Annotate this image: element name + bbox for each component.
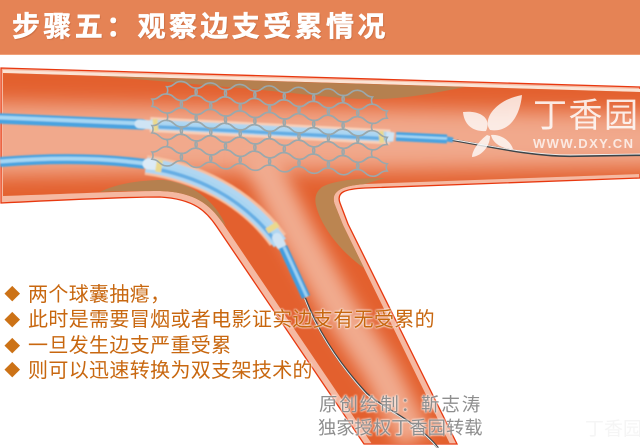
plaque: top <box>95 76 465 99</box>
bullet text 1: 两个球囊抽瘪， <box>28 284 170 306</box>
header band <box>0 0 640 55</box>
logo: flower <box>463 95 522 157</box>
bullet marker 4 <box>4 362 19 377</box>
logo: name: 丁香园 <box>533 97 640 135</box>
upper wall highlight <box>3 70 640 92</box>
guide wire: main <box>452 140 640 156</box>
bullet marker 3 <box>4 338 19 353</box>
bullet text 3: 一旦发生边支严重受累 <box>28 335 232 357</box>
guide wire: branch <box>305 298 438 448</box>
balloon: branch <box>146 160 281 245</box>
credit: license: 独家授权丁香园转载 <box>318 417 483 438</box>
bullet list <box>4 284 435 382</box>
stent mesh <box>152 80 387 177</box>
credit: author: 原创绘制：靳志涛 <box>319 394 482 415</box>
title: 步骤五：观察边支受累情况 <box>12 11 389 42</box>
plaque: right carina <box>315 178 385 268</box>
logo: url: WWW.DXY.CN <box>533 136 634 151</box>
catheter: branch shaft lower <box>283 247 307 297</box>
bullet text 4: 则可以迅速转换为双支架技术的 <box>28 360 313 382</box>
catheter: main shaft right <box>396 136 453 140</box>
catheter: branch shaft upper <box>0 159 145 164</box>
bullet marker 1 <box>4 286 19 301</box>
plaque: lower left <box>100 180 226 226</box>
catheter: main shaft left <box>0 118 142 124</box>
balloon: main <box>139 119 394 143</box>
bullet marker 2 <box>4 312 19 327</box>
bullet text 2: 此时是需要冒烟或者电影证实边支有无受累的 <box>28 309 435 331</box>
